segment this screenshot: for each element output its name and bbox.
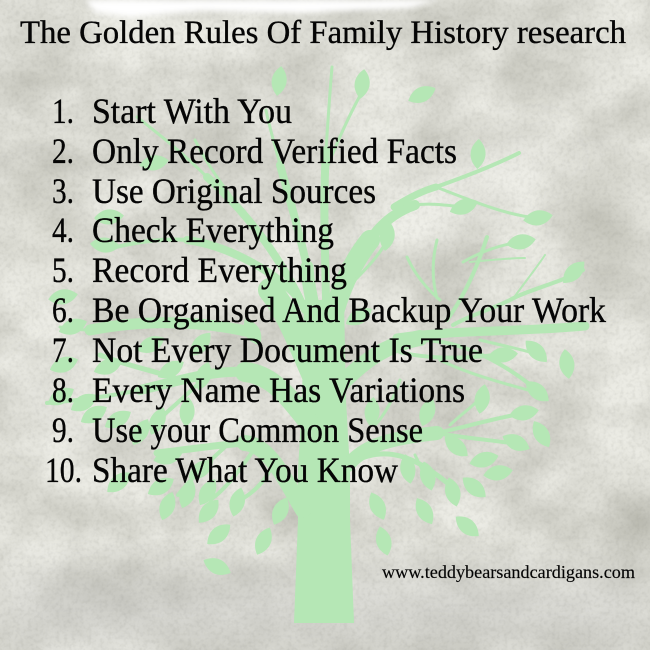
tree leaves <box>44 65 590 580</box>
rule 5: Record Everything <box>92 250 347 290</box>
numbered list of golden rules <box>45 91 606 490</box>
rule 3: 3. <box>52 171 74 211</box>
rule 10: 10. <box>45 450 82 490</box>
tree trunk <box>294 300 354 623</box>
rule 8: Every Name Has Variations <box>92 370 465 410</box>
rule 2: 2. <box>52 131 74 171</box>
rule 9: Use your Common Sense <box>92 410 423 450</box>
rule 6: Be Organised And Backup Your Work <box>92 290 606 330</box>
rule 4: 4. <box>52 210 74 250</box>
rule 10: Share What You Know <box>92 450 398 490</box>
rule 3: Use Original Sources <box>92 171 376 211</box>
tree branches <box>47 67 585 510</box>
rule 7: Not Every Document Is True <box>92 330 483 370</box>
rule 2: Only Record Verified Facts <box>92 131 457 171</box>
title: The Golden Rules Of Family History research <box>20 15 626 51</box>
rule 8: 8. <box>52 370 74 410</box>
website credit: www.teddybearsandcardigans.com <box>382 562 635 582</box>
rule 7: 7. <box>52 330 74 370</box>
rule 1: 1. <box>52 91 74 131</box>
rule 6: 6. <box>52 290 74 330</box>
rule 4: Check Everything <box>92 210 334 250</box>
rule 1: Start With You <box>92 91 292 131</box>
icon: green family tree <box>44 65 590 623</box>
rule 5: 5. <box>52 250 74 290</box>
rule 9: 9. <box>52 410 74 450</box>
